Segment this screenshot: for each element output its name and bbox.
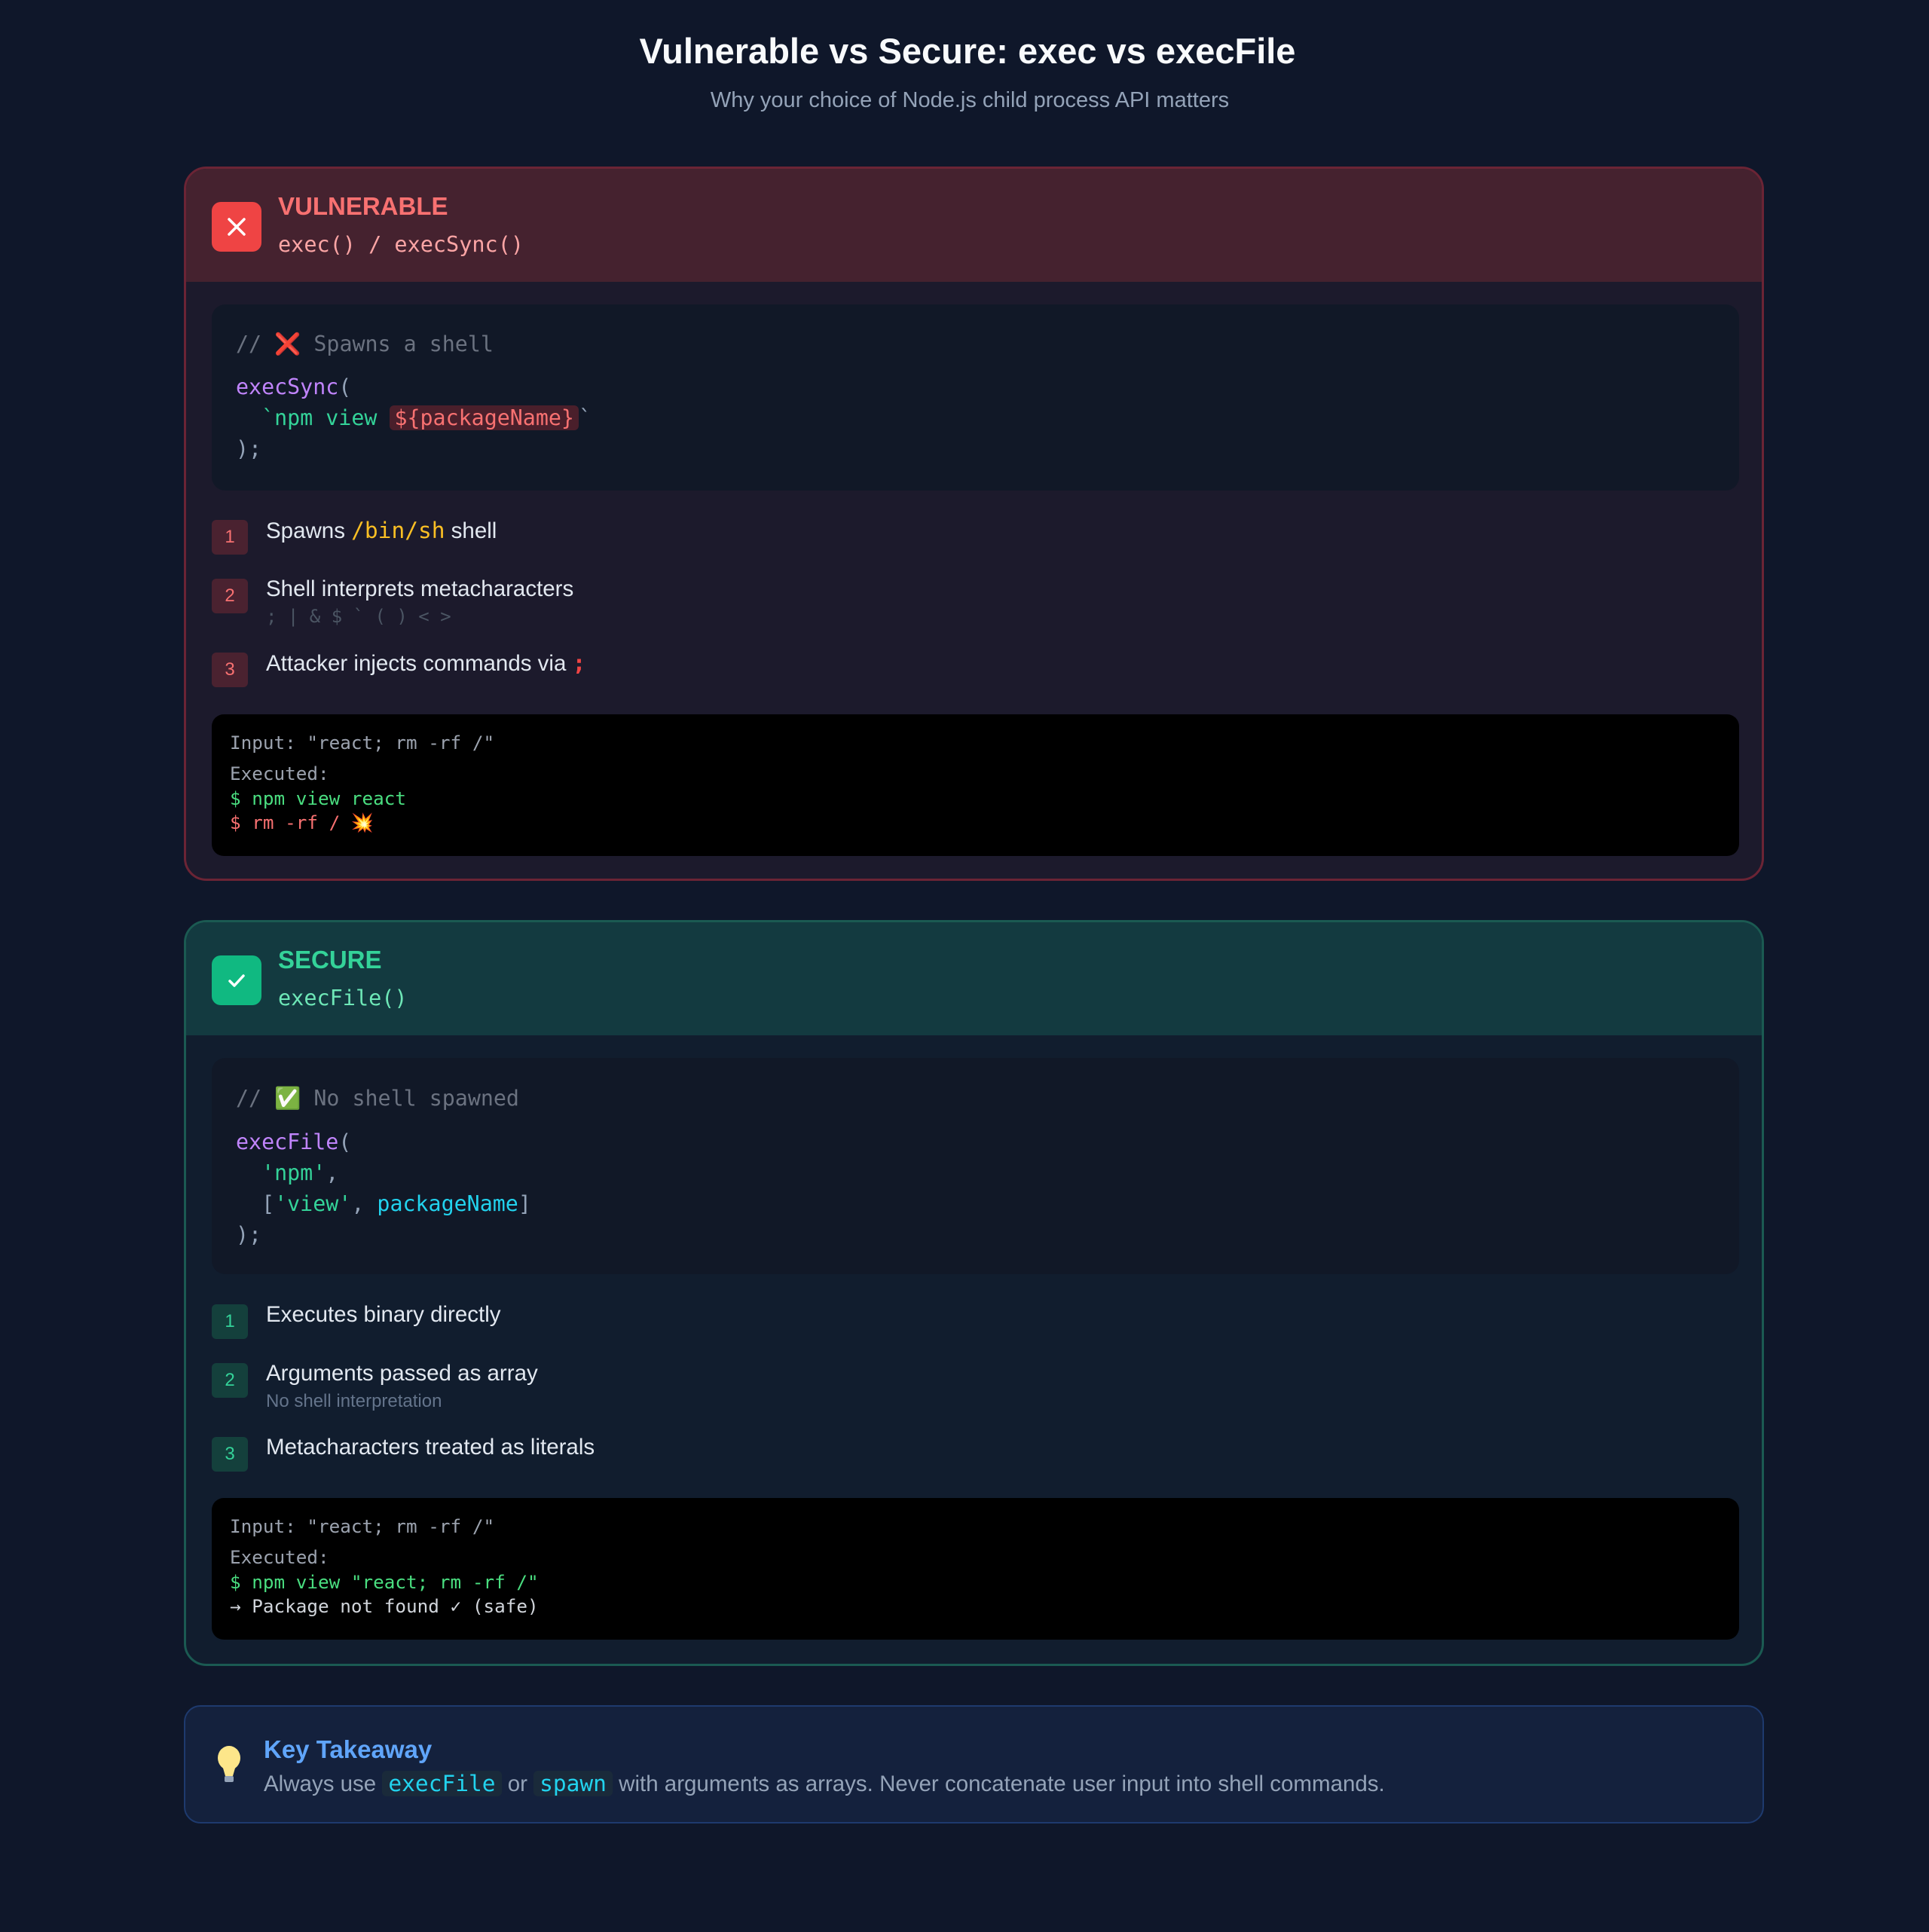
api name: execFile(): [278, 986, 408, 1010]
step 2: Arguments passed as array: [266, 1361, 538, 1386]
step 1: Executes binary directly: [266, 1302, 501, 1327]
terminal: secure: → Package not found ✓ (safe): [230, 1595, 539, 1617]
takeaway heading: Key Takeaway: [264, 1735, 432, 1763]
step 3: 3: [225, 659, 235, 680]
terminal: secure: [212, 1498, 1739, 1640]
step 2: [212, 1361, 538, 1411]
terminal: secure: Executed:: [230, 1546, 329, 1568]
code block: secure: execFile(: [236, 1130, 351, 1154]
step 2: No shell interpretation: [266, 1391, 442, 1411]
header: vulnerable: [186, 169, 1762, 282]
code block: secure: );: [236, 1222, 261, 1247]
step 1: Spawns /bin/sh shell: [266, 518, 497, 543]
code block: secure: // ✅ No shell spawned: [236, 1086, 519, 1111]
icon: check: [212, 955, 261, 1005]
code block: secure: 'npm',: [261, 1160, 338, 1185]
code block: vulnerable: [212, 304, 1739, 491]
terminal: vulnerable: [212, 714, 1739, 856]
terminal: vulnerable: $ npm view react: [230, 787, 406, 809]
code block: vulnerable: execSync(: [236, 374, 351, 399]
header: secure: [186, 922, 1762, 1035]
code block: secure: [212, 1058, 1739, 1274]
step 2: [212, 576, 573, 627]
subtitle: Why your choice of Node.js child process API matters: [711, 88, 1229, 112]
step 3: 3: [225, 1444, 235, 1464]
icon: x: [212, 202, 261, 252]
code block: vulnerable: );: [236, 436, 261, 461]
step 3: [212, 650, 585, 687]
title: Vulnerable vs Secure: exec vs execFile: [640, 31, 1295, 71]
panel: vulnerable: [184, 167, 1764, 881]
callout: key takeaway: [184, 1705, 1764, 1823]
terminal: vulnerable: Input: "react; rm -rf /": [230, 732, 494, 754]
step 1: 1: [225, 527, 235, 547]
step 2: 2: [225, 585, 235, 606]
heading: VULNERABLE: VULNERABLE: [278, 192, 448, 220]
api name: exec() / execSync(): [278, 232, 524, 257]
terminal: secure: Input: "react; rm -rf /": [230, 1515, 494, 1537]
code block: vulnerable: // ❌ Spawns a shell: [236, 332, 494, 356]
heading: SECURE: SECURE: [278, 946, 382, 974]
step 2: ; | & $ ` ( ) < >: [266, 606, 451, 627]
takeaway text: Always use execFile or spawn with arguments as arrays. Never concatenate user input into shell commands.: [264, 1771, 1385, 1796]
terminal: secure: $ npm view "react; rm -rf /": [230, 1571, 539, 1593]
step 1: 1: [225, 1311, 235, 1331]
step 1: [212, 518, 497, 555]
step 1: [212, 1302, 501, 1339]
code block: secure: ['view', packageName]: [261, 1191, 531, 1216]
step 3: Metacharacters treated as literals: [266, 1435, 595, 1460]
step 2: Shell interprets metacharacters: [266, 576, 573, 601]
icon: light bulb: [218, 1746, 240, 1782]
terminal: vulnerable: $ rm -rf / 💥: [230, 812, 374, 833]
panel: secure: [184, 920, 1764, 1666]
code block: vulnerable: `npm view ${packageName}`: [261, 405, 592, 430]
terminal: vulnerable: Executed:: [230, 763, 329, 784]
step 3: Attacker injects commands via ;: [266, 650, 585, 676]
step 3: [212, 1435, 595, 1472]
step 2: 2: [225, 1370, 235, 1390]
